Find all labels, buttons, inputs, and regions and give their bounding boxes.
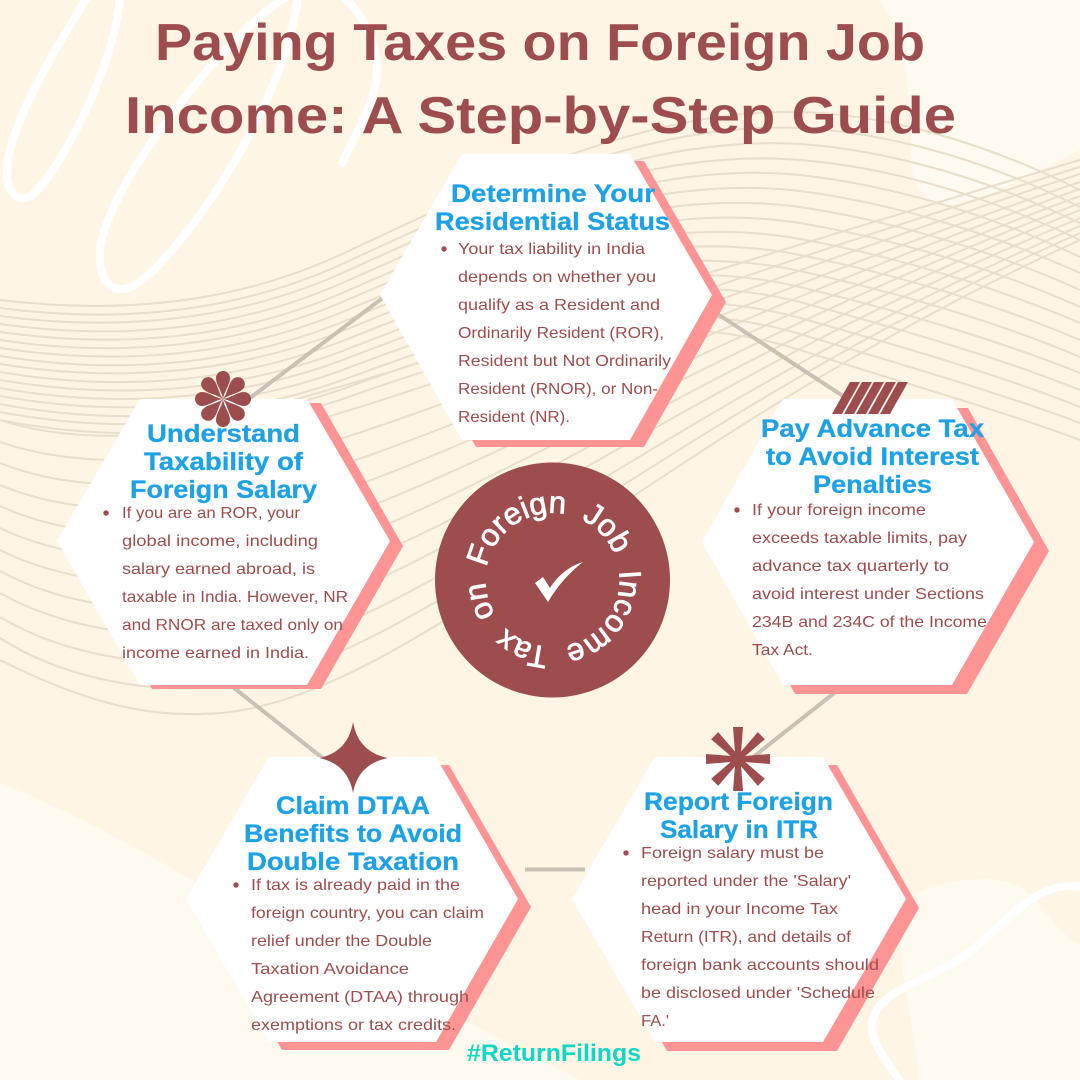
icon: four-point star [319,722,388,793]
body text: advance tax: avoid interest under Sections [752,586,984,603]
body text: residential status: Ordinarily Resident (ROR), [458,325,664,342]
center badge [435,462,670,698]
heading: understand taxability: Foreign Salary [130,476,317,504]
body text: residential status: Resident (NR). [458,409,570,426]
panel: understand taxability of foreign salary [57,399,403,689]
title: Income: A Step-by-Step Guide [125,87,956,145]
body text: advance tax: advance tax quarterly to [752,558,949,575]
body text: taxability: global income, including [122,533,318,550]
heading: pay advance tax [761,415,984,499]
heading: claim DTAA [244,792,462,876]
body text: taxability: taxable in India. However, NR [122,589,348,606]
heading: pay advance tax: Penalties [813,471,932,499]
heading: claim DTAA: Claim DTAA [276,792,430,820]
body text: ITR: be disclosed under 'Schedule [641,985,875,1002]
body text: taxability: and RNOR are taxed only on [122,617,343,634]
body text: DTAA: Taxation Avoidance [251,961,409,978]
body text: DTAA: relief under the Double [251,933,432,950]
body text: ITR: reported under the 'Salary' [641,873,851,890]
heading: report foreign salary: Salary in ITR [660,816,818,844]
icon: asterisk [706,727,770,791]
body text: ITR [623,845,879,1030]
body text: taxability: salary earned abroad, is [122,561,315,578]
body text: DTAA: If tax is already paid in the [251,877,460,894]
heading: understand taxability: Understand [147,420,300,448]
body text: residential status: qualify as a Resident and [458,297,660,314]
heading: determine your residential status [435,180,670,236]
heading: pay advance tax: to Avoid Interest [766,443,980,471]
body text: residential status: Resident but Not Ordinarily [458,353,671,370]
body text: ITR: Foreign salary must be [641,845,824,862]
panel: determine your residential status [380,154,726,447]
body text: ITR: head in your Income Tax [641,901,838,918]
heading: understand taxability: Taxability of [144,448,304,476]
body text: taxability: If you are an ROR, your [122,505,301,522]
body text: advance tax [734,502,987,659]
body text: residential status: Resident (RNOR), or Non- [458,381,658,398]
body text: DTAA: exemptions or tax credits. [251,1017,456,1034]
body text: DTAA: Agreement (DTAA) through [251,989,469,1006]
body text: residential status: depends on whether you [458,269,656,286]
circular text: Foreign Job Income Tax on [466,496,642,669]
heading: determine your residential status: Determine Your [451,180,655,208]
heading: claim DTAA: Double Taxation [247,848,459,876]
panel: report foreign salary in ITR [572,757,919,1051]
connector lines [234,297,846,870]
body text: advance tax: exceeds taxable limits, pay [752,530,967,547]
body text: taxability: income earned in India. [122,645,309,662]
heading: report foreign salary [644,788,833,844]
hashtag: #ReturnFilings [467,1040,641,1067]
body text: ITR: Return (ITR), and details of [641,929,852,946]
icon: flower [195,371,251,427]
body text: advance tax: 234B and 234C of the Income [752,614,987,631]
icon: check mark [535,562,583,602]
body text: ITR: FA.' [641,1013,669,1030]
heading: report foreign salary: Report Foreign [644,788,833,816]
body text: advance tax: If your foreign income [752,502,926,519]
body text: DTAA: foreign country, you can claim [251,905,484,922]
body text: taxability [103,505,348,662]
panel: pay advance tax [702,399,1049,694]
body text: residential status: Your tax liability in India [458,241,645,258]
heading: pay advance tax: Pay Advance Tax [761,415,984,443]
heading: understand taxability [130,420,317,504]
body text: residential status [441,241,671,426]
title: Paying Taxes on Foreign Job [155,14,925,72]
heading: claim DTAA: Benefits to Avoid [244,820,462,848]
heading: determine your residential status: Residential Status [435,208,670,236]
panel: claim DTAA benefits [186,757,531,1050]
body text: advance tax: Tax Act. [752,642,813,659]
title [125,14,956,145]
body text: ITR: foreign bank accounts should [641,957,879,974]
body text: DTAA [233,877,484,1034]
icon: diagonal stripes [832,382,908,414]
